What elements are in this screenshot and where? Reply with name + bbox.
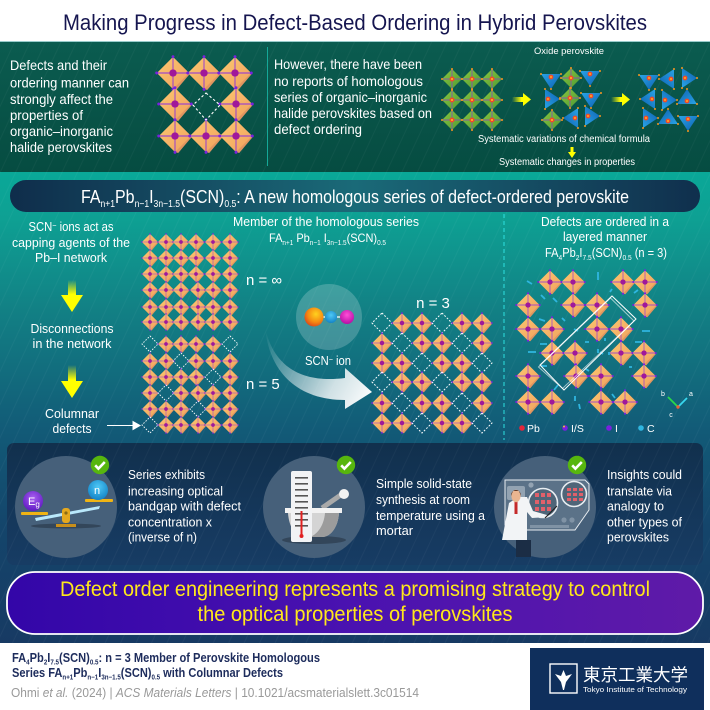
heading: member of the homologous series: 3n−1.5	[327, 240, 347, 247]
text: benefit 2: Simple solid-state	[376, 476, 472, 491]
footer: paper title: FA	[12, 651, 28, 665]
text: SCN capping	[12, 220, 130, 265]
logo: Tokyo Institute of Technology	[530, 648, 704, 710]
heading: defects layered: 7.5	[583, 253, 592, 262]
text: benefit 3: Insights could	[607, 467, 682, 482]
text: no reports: no reports of homologous	[274, 73, 423, 89]
heading: defects layered: layered manner	[563, 230, 647, 244]
footer: paper title: I	[98, 666, 101, 680]
arrow: stage 1 to 2	[512, 93, 531, 106]
icon: thermometer and mortar	[263, 456, 365, 558]
footer: paper title: Pb	[73, 666, 88, 680]
panel: benefits	[7, 443, 703, 565]
label: n = infinity: n = ∞	[246, 272, 282, 289]
text: columnar defects: defects	[52, 422, 92, 436]
footer: paper title: 0.5	[152, 674, 160, 682]
heading: member of the homologous series: (SCN)	[347, 231, 377, 245]
banner heading: n+1	[100, 199, 115, 210]
text: no reports: halide perovskites based on	[274, 105, 432, 121]
text: benefit 2: temperature using a	[376, 508, 486, 523]
text: benefit 3: analogy to	[607, 498, 664, 514]
diagram: oxide perovskite stage 3	[638, 67, 699, 132]
heading: member of the homologous series: Member of the homologous series	[233, 215, 419, 229]
footer: paper title	[12, 651, 320, 682]
footer: paper title: Pb	[30, 651, 44, 665]
label: n = 5: n = 5	[246, 376, 280, 393]
heading: defects layered: 4	[559, 253, 562, 262]
text: benefit 1: concentration x	[128, 514, 212, 530]
label: oxide perovskite: Oxide perovskite	[534, 46, 604, 57]
footer: paper title: 4	[26, 660, 30, 666]
text: SCN capping: Pb–I network	[35, 251, 108, 265]
diagram: oxide perovskite stage 1	[441, 68, 503, 131]
text: SCN capping: ions act as	[57, 220, 114, 234]
heading: defects layered: (n = 3)	[632, 246, 667, 260]
axes indicator: c	[669, 412, 673, 419]
footer: paper title: with Columnar Defects	[160, 666, 283, 680]
heading: member of the homologous series: n−1	[310, 240, 321, 247]
text: disconnections: in the network	[32, 337, 112, 351]
heading: defects layered	[541, 215, 669, 262]
legend: atoms: C	[647, 423, 655, 435]
heading: member of the homologous series	[233, 215, 419, 247]
text: benefit 3: translate via	[607, 484, 673, 498]
footer white band	[0, 643, 710, 710]
arrow: curved white	[265, 328, 372, 409]
logo emblem	[550, 664, 577, 693]
text: defects intro	[10, 57, 129, 155]
heading: defects layered: 0.5	[622, 253, 632, 262]
banner heading: n−1	[135, 199, 149, 210]
text: defects intro: ordering manner can	[10, 74, 129, 90]
text: benefit 1	[128, 467, 241, 544]
icon: perovskite lattice with central defect	[155, 55, 254, 154]
icon: scientist at screen	[494, 456, 596, 558]
legend: atoms: I/S	[571, 423, 584, 435]
legend: atoms: Pb	[527, 423, 540, 435]
banner heading: FA	[81, 186, 101, 207]
banner heading: : A new homologous series of defect-ordered perovskite	[236, 186, 629, 207]
footer: paper title: (SCN)	[121, 666, 152, 680]
text: SCN capping: SCN	[28, 220, 55, 234]
footer: paper title: 2	[44, 660, 47, 666]
label: SCN ion: ion	[333, 354, 351, 368]
conclusion pill	[7, 572, 703, 634]
text: systematic variations: Systematic variations of chemical formula	[478, 134, 650, 145]
text: benefit 3: perovskites	[607, 530, 669, 544]
banner heading: Pb	[115, 186, 135, 207]
footer: paper title: I	[47, 651, 50, 665]
text: benefit 1: Series exhibits	[128, 467, 205, 482]
text: systematic changes: Systematic changes in properties	[499, 157, 635, 168]
axes indicator	[661, 391, 693, 419]
heading: defects layered: FA	[545, 246, 560, 260]
logo: Tokyo Institute of Technology: 東京工業大学	[583, 665, 688, 685]
icon: balance scale: E	[28, 496, 35, 508]
heading: defects layered: 2	[576, 253, 579, 262]
text: benefit 1: bandgap with defect	[128, 498, 241, 514]
heading: member of the homologous series: FA	[269, 231, 284, 245]
crystal structure n = 3	[515, 269, 658, 415]
legend: atoms	[519, 423, 655, 435]
arrow: yellow down 1	[61, 280, 83, 312]
icon: check 2	[337, 456, 355, 474]
footer: paper title: 3n−1.5	[101, 674, 121, 682]
lattice: n = 3	[371, 312, 493, 434]
icon: check 3	[568, 456, 586, 474]
footer: paper title: 0.5	[90, 660, 99, 666]
text: defects intro: strongly affect the	[10, 91, 113, 107]
arrow: small yellow down	[568, 147, 576, 158]
label: n = 3: n = 3	[416, 295, 450, 312]
lattice: n = 5	[141, 335, 239, 434]
banner heading: 0.5	[224, 199, 237, 210]
lattice: n = infinity	[141, 233, 239, 331]
label: SCN ion: −	[329, 355, 333, 364]
text: SCN capping: −	[52, 221, 57, 230]
label: SCN ion: SCN	[305, 354, 331, 368]
heading: defects layered: Pb	[562, 246, 576, 260]
arrow: white pointer	[107, 422, 140, 430]
text: no reports: series of organic–inorganic	[274, 89, 427, 105]
text: benefit 2: mortar	[376, 523, 414, 538]
icon: balance scale: g	[35, 500, 40, 509]
text: disconnections: Disconnections	[30, 322, 114, 336]
diagram: oxide perovskite stage 2	[540, 67, 602, 131]
text: benefit 1: (inverse of n)	[128, 530, 197, 544]
footer: paper title: (SCN)	[59, 651, 90, 665]
icon: SCN ion	[296, 284, 362, 350]
heading: member of the homologous series: 0.5	[377, 240, 386, 247]
text: disconnections	[30, 322, 114, 351]
text: defects intro: properties of	[10, 107, 83, 123]
text: benefit 3	[607, 467, 682, 544]
text: no reports: defect ordering	[274, 121, 362, 137]
text: no reports: However, there have been	[274, 56, 422, 72]
heading: defects layered: (SCN)	[592, 246, 622, 260]
text: columnar defects: Columnar	[45, 407, 99, 421]
column: mechanism steps	[12, 220, 140, 436]
footer: paper title: 7.5	[50, 660, 59, 666]
text: SCN capping: capping agents of the	[12, 236, 130, 250]
text: benefit 3: other types of	[607, 514, 682, 530]
icon: balance scale: n	[94, 485, 100, 497]
footer: paper title: n−1	[87, 674, 98, 682]
axes indicator: a	[689, 391, 693, 398]
conclusion pill: Defect order engineering represents a promising strategy to control	[60, 578, 650, 601]
icon: balance scale	[15, 456, 117, 558]
text: columnar defects	[45, 407, 99, 436]
title: Making Progress in Defect-Based Ordering in Hybrid Perovskites	[63, 10, 647, 35]
footer: paper title: n+1	[62, 674, 73, 682]
text: defects intro: halide perovskites	[10, 139, 112, 155]
banner heading: I	[149, 186, 154, 207]
text: defects intro: organic–inorganic	[10, 123, 113, 139]
heading: defects layered: Defects are ordered in a	[541, 215, 669, 229]
banner heading	[10, 180, 700, 212]
icon: check 1	[91, 456, 109, 474]
heading: defects layered: I	[579, 246, 583, 260]
text: defects intro: Defects and their	[10, 57, 107, 73]
footer: paper title: Series FA	[12, 666, 69, 680]
heading: member of the homologous series: n+1	[282, 240, 293, 247]
footer: paper title: : n = 3 Member of Perovskite Homologous	[98, 651, 320, 665]
heading: member of the homologous series: I	[321, 231, 327, 245]
heading: member of the homologous series: Pb	[293, 231, 310, 245]
logo: Tokyo Institute of Technology: Tokyo Institute of Technology	[583, 685, 687, 694]
arrow: stage 2 to 3	[611, 93, 630, 106]
text: benefit 2	[376, 476, 486, 538]
banner heading: 3n−1.5	[154, 199, 180, 210]
panel: introduction	[0, 41, 710, 172]
page background	[0, 172, 710, 644]
legend: atoms: I	[615, 423, 618, 435]
conclusion pill: the optical properties of perovskites	[198, 603, 512, 626]
banner heading: (SCN)	[180, 186, 224, 207]
axes indicator: b	[661, 391, 665, 398]
arrow: yellow down 2	[61, 365, 83, 398]
footer: citation: Ohmi et al. (2024) | ACS Materials Letters | 10.1021/acsmaterialslett.3c01514	[11, 686, 419, 700]
text: benefit 2: synthesis at room	[376, 492, 470, 507]
text: benefit 1: increasing optical	[128, 484, 223, 498]
text: no reports	[274, 56, 432, 137]
